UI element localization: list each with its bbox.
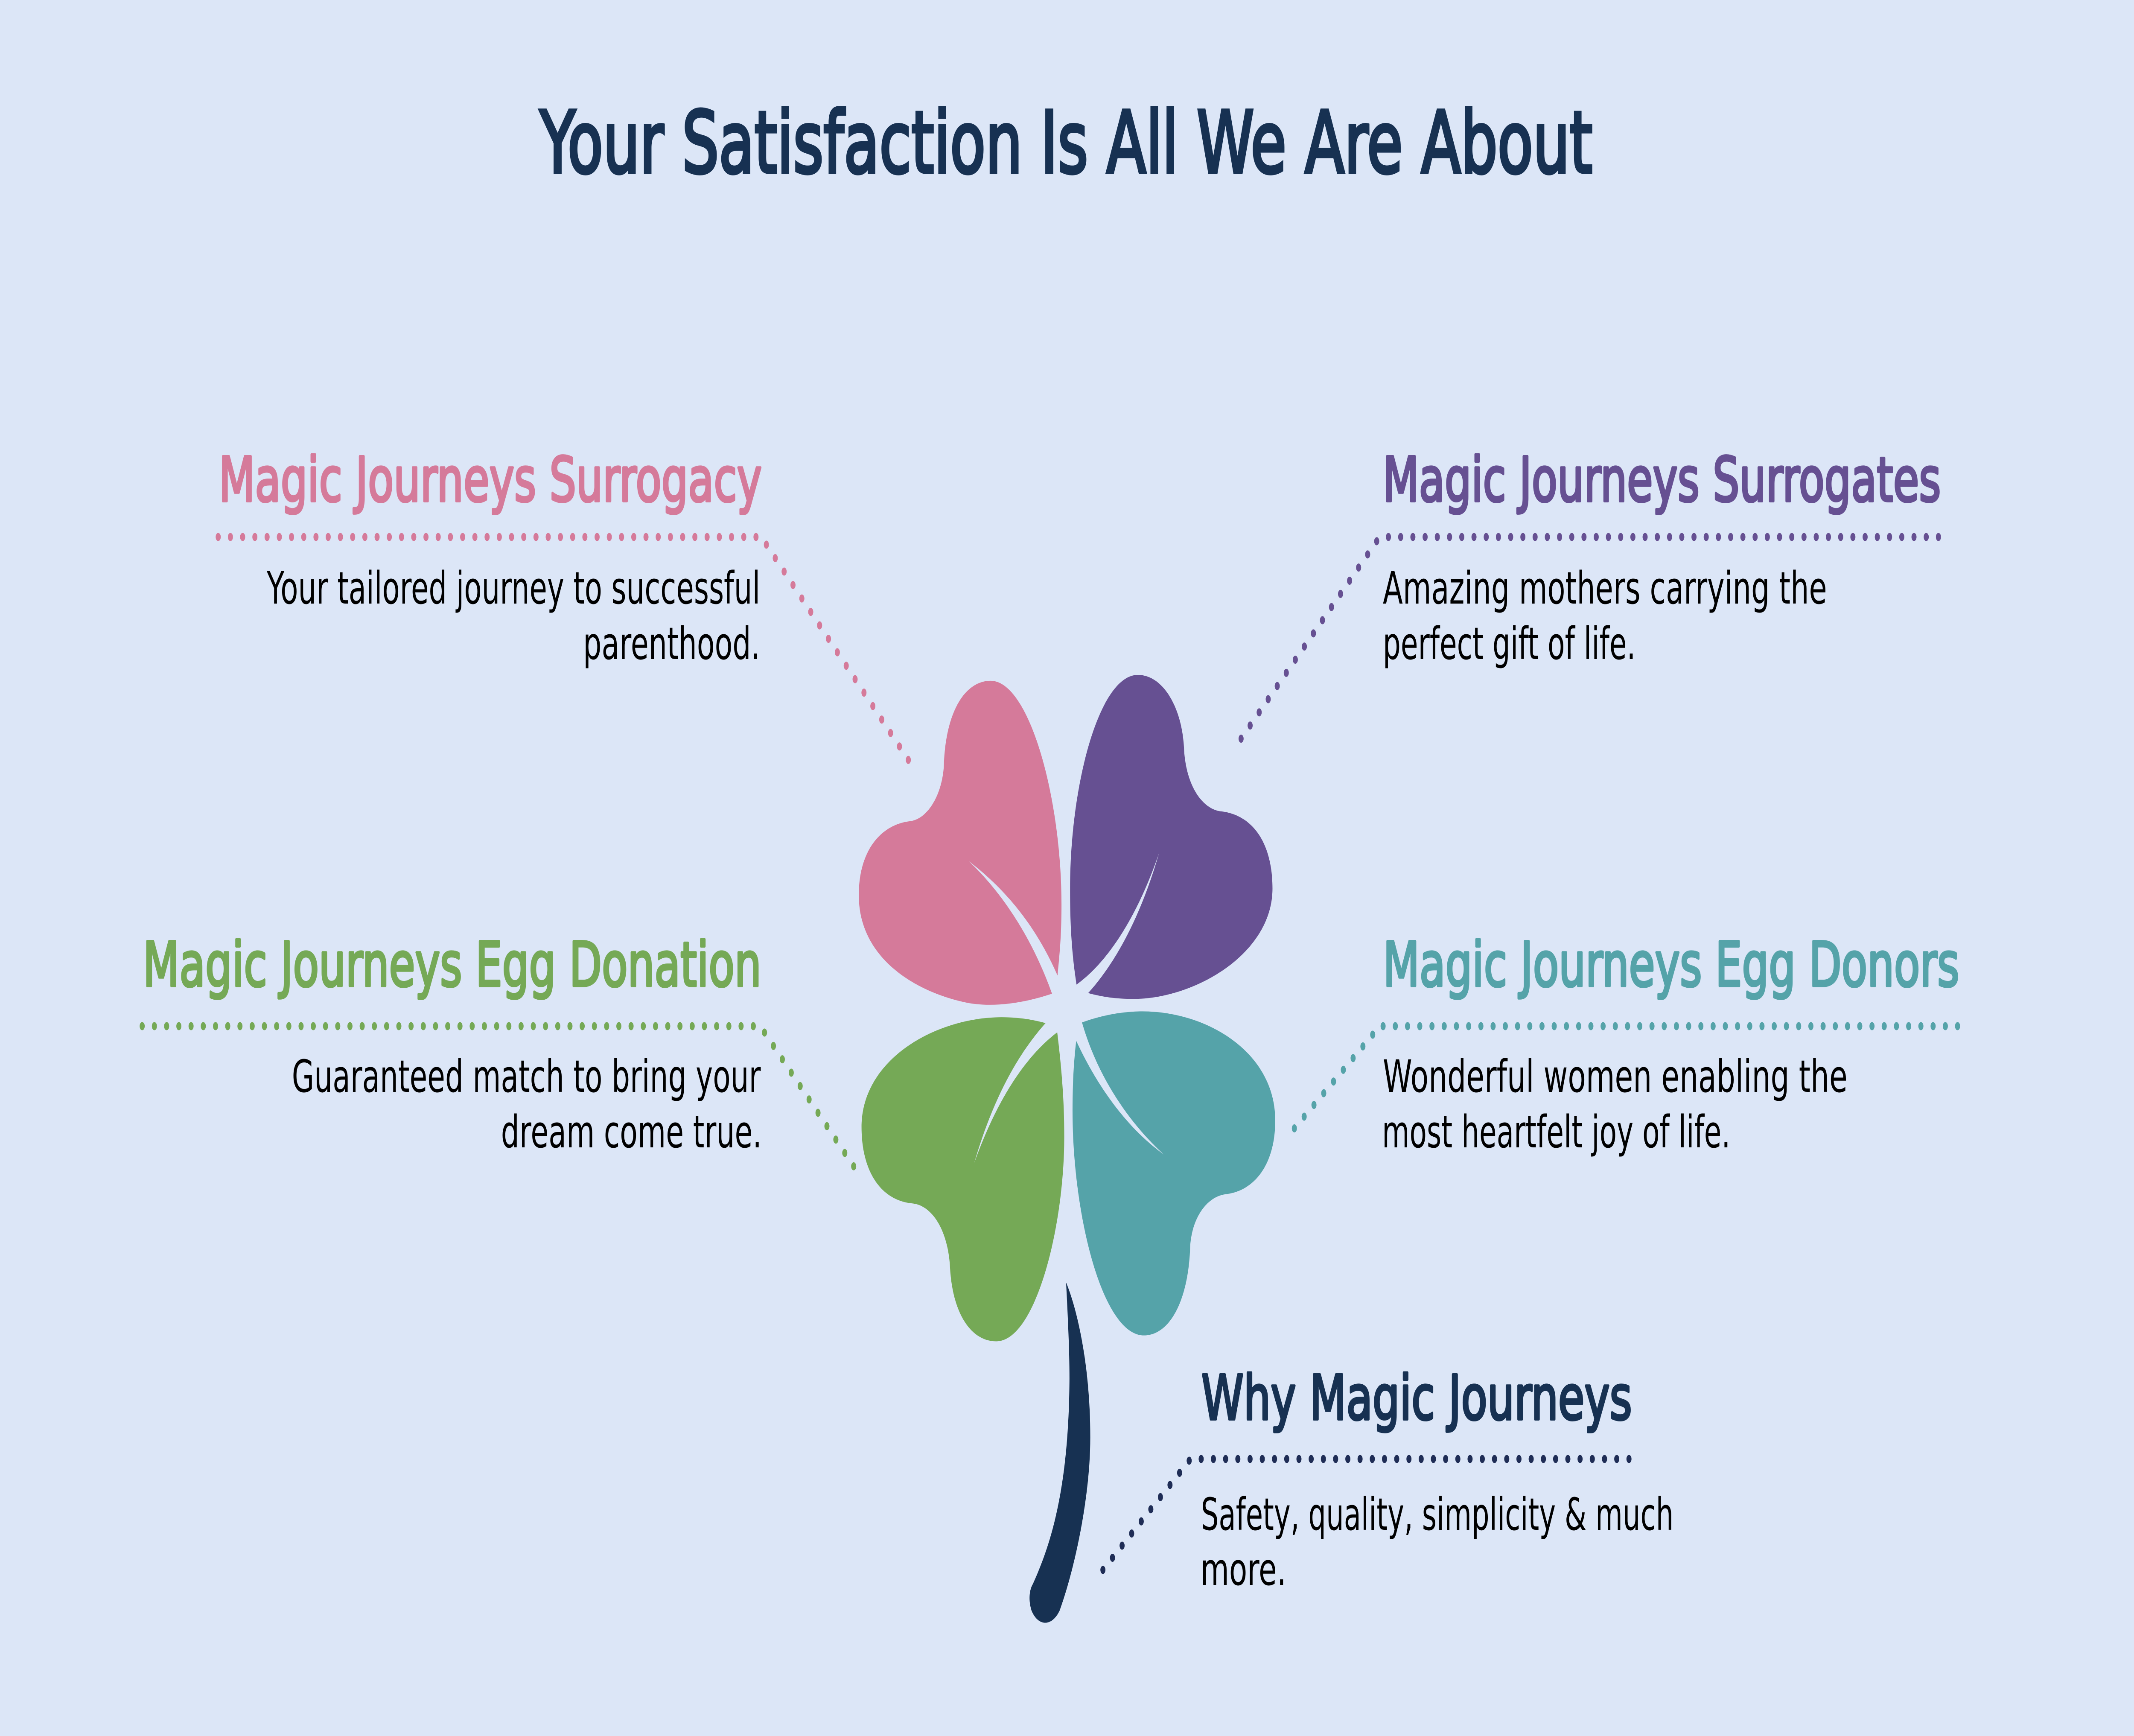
- leaf: teal egg donors: [1073, 1011, 1275, 1336]
- text: egg donation description: Guaranteed match to bring your: [292, 1051, 761, 1103]
- heading: egg donors: Magic Journeys Egg Donors: [1383, 930, 1959, 1001]
- heading: why magic journeys: Why Magic Journeys: [1201, 1363, 1632, 1434]
- text: surrogacy description: parenthood.: [583, 619, 760, 670]
- title: Your Satisfaction Is All We Are About: [539, 93, 1592, 193]
- dotted connector: surrogates: [1241, 537, 1939, 739]
- heading: surrogacy: Magic Journeys Surrogacy: [219, 445, 762, 516]
- text: surrogates description: [1383, 563, 1827, 670]
- text: why magic journeys description: Safety, quality, simplicity & much: [1201, 1489, 1673, 1541]
- panel: magic journeys egg donation: [142, 930, 854, 1167]
- panel: magic journeys surrogates: [1241, 445, 1941, 739]
- dotted connector: egg donors: [1294, 1026, 1958, 1129]
- heading: surrogates: Magic Journeys Surrogates: [1383, 445, 1941, 516]
- dotted connector: egg donation: [142, 1026, 854, 1167]
- text: surrogacy description: Your tailored journey to successful: [266, 563, 760, 614]
- text: surrogacy description: [266, 563, 760, 670]
- heading: egg donation: Magic Journeys Egg Donation: [143, 930, 761, 1001]
- text: egg donors description: most heartfelt joy of life.: [1382, 1107, 1730, 1158]
- icon: four-leaf clover: [859, 675, 1275, 1623]
- panel: magic journeys egg donors: [1294, 930, 1959, 1158]
- text: surrogates description: perfect gift of life.: [1383, 619, 1636, 670]
- text: why magic journeys description: more.: [1200, 1544, 1286, 1596]
- text: egg donation description: dream come true.: [501, 1107, 762, 1158]
- panel: why magic journeys: [1102, 1363, 1673, 1596]
- clover stem: [1029, 1283, 1090, 1623]
- panel: magic journeys surrogacy: [218, 445, 909, 761]
- leaf: purple surrogates: [1070, 675, 1272, 999]
- text: surrogates description: Amazing mothers carrying the: [1383, 563, 1827, 614]
- dotted connector: why magic journeys: [1102, 1459, 1630, 1571]
- text: why magic journeys description: [1200, 1489, 1673, 1596]
- dotted connector: surrogacy: [218, 537, 909, 761]
- text: egg donors description: Wonderful women enabling the: [1383, 1051, 1848, 1103]
- leaf: green egg donation: [862, 1017, 1064, 1341]
- leaf: pink surrogacy: [859, 681, 1061, 1005]
- text: egg donation description: [292, 1051, 762, 1158]
- text: egg donors description: [1382, 1051, 1848, 1158]
